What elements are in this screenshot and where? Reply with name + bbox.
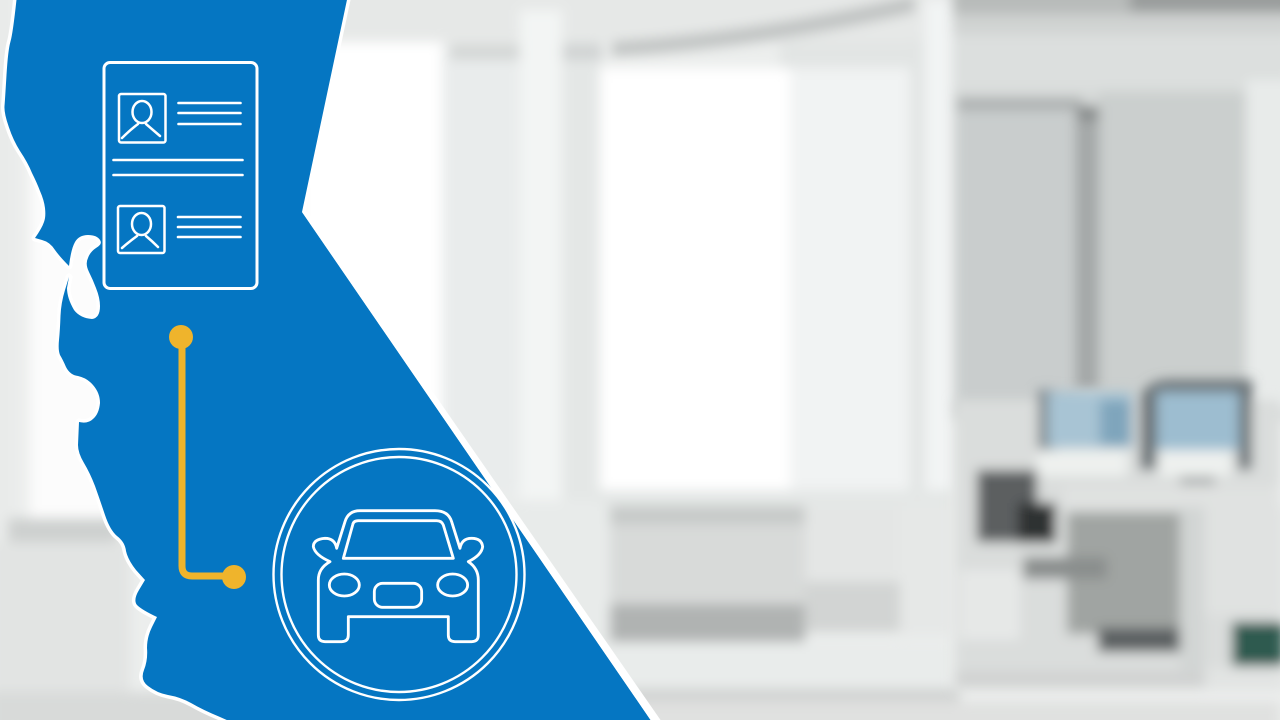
arrow: yellow connector: [169, 325, 246, 589]
map of California: [4, 0, 664, 720]
car front: [313, 511, 483, 642]
icon: personnel document: [104, 62, 257, 288]
divider text lines: [114, 160, 242, 175]
portrait: top applicant: [119, 94, 166, 142]
outer rings: [274, 449, 524, 700]
text lines: bottom applicant: [178, 217, 240, 237]
icon: car in double circle: [274, 449, 524, 700]
portrait: bottom applicant: [118, 206, 164, 253]
text lines: top applicant: [178, 103, 240, 124]
document outline: [104, 62, 257, 288]
